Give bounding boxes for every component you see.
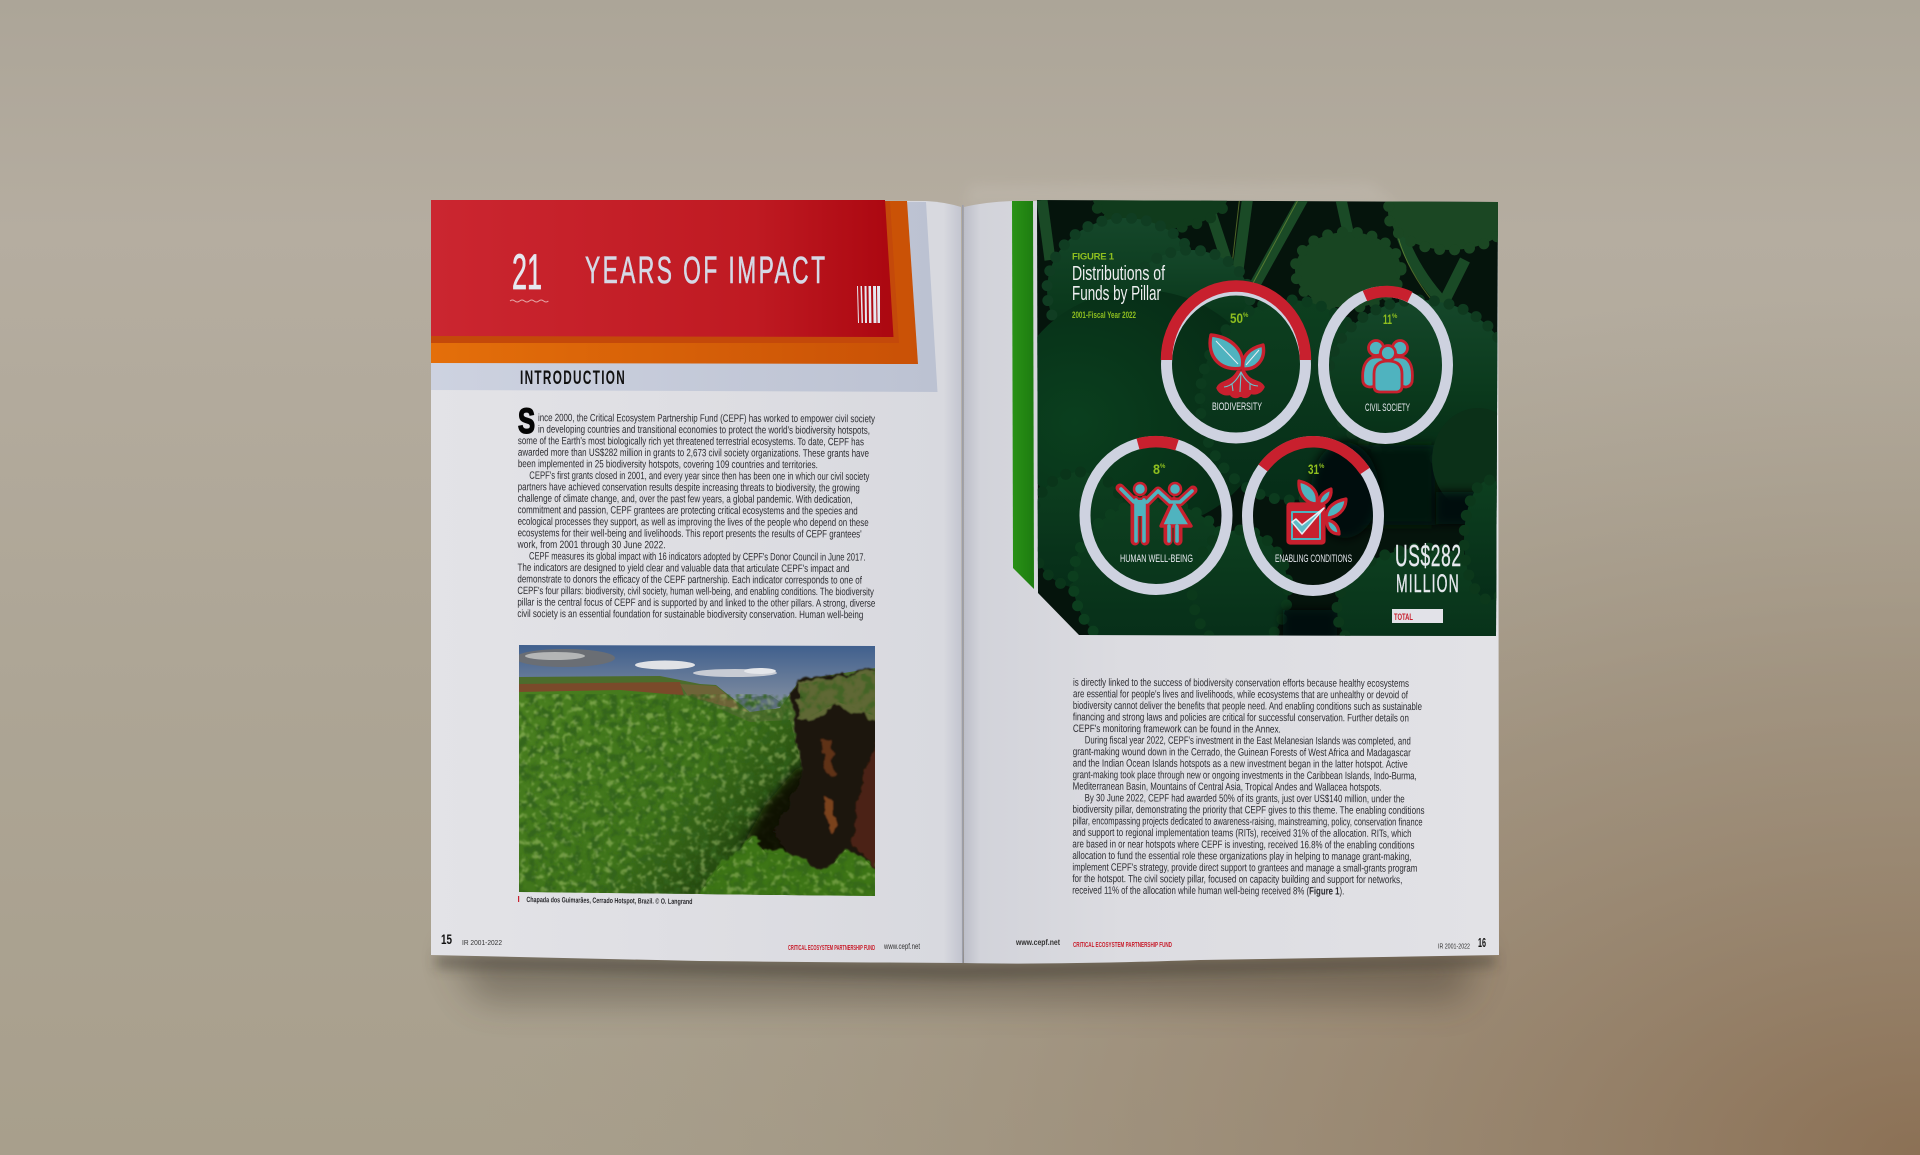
body text right page: are based in or near hotspots where CEPF is investing, received 16.8% of the enabling conditions xyxy=(1072,838,1414,852)
body text right page: received 11% of the allocation while human well-being received 8% (Figure 1). xyxy=(1072,885,1344,898)
figure heading: Distributions of xyxy=(1072,263,1165,285)
body text left page: CEPF's four pillars: biodiversity, civil society, human well-being, and enabling conditions. The biodiversity xyxy=(517,585,874,598)
footer right page: CRITICAL ECOSYSTEM PARTNERSHIP FUND xyxy=(1073,942,1172,949)
body text right page: grant-making wound down in the Cerrado, the Guinean Forests of West Africa and Madagascar xyxy=(1073,746,1411,759)
body text left page: ecosystems for their well-being and livelihoods. This report presents the results of CEPF grantees' xyxy=(518,527,862,541)
magazine shadow xyxy=(436,183,1495,1000)
footer left page: IR 2001-2022 xyxy=(462,938,502,947)
footer right page xyxy=(1015,935,1486,950)
body text right page: allocation to fund the essential role these organizations play in helping to manage grant-making, xyxy=(1072,850,1411,863)
ring: enabling conditions 31%: ENABLING CONDITIONS xyxy=(1275,553,1352,565)
drop cap: S xyxy=(518,402,535,441)
ring: civil society 11%: CIVIL SOCIETY xyxy=(1365,402,1410,414)
body text left page: awarded more than US$282 million in grants to 2,673 civil society organizations. These grants have xyxy=(518,447,869,460)
body text left page: civil society is an essential foundation for sustainable biodiversity conservation. Human well-being xyxy=(517,608,863,621)
body text left page: been implemented in 25 biodiversity hotspots, covering 109 countries and territories. xyxy=(518,458,818,471)
body text right page: is directly linked to the success of biodiversity conservation efforts because healthy ecosystems xyxy=(1073,677,1409,690)
footer left page: 15 xyxy=(441,932,452,947)
photo caption: Chapada dos Guimarães, Cerrado Hotspot, Brazil. © O. Langrand xyxy=(526,895,693,906)
body text left page: work, from 2001 through 30 June 2022. xyxy=(517,539,666,551)
body text right page: Mediterranean Basin, Mountains of Central Asia, Tropical Andes and Wallacea hotspots. xyxy=(1073,781,1382,794)
icon: leaves and roots xyxy=(1210,335,1264,397)
left page xyxy=(431,200,962,963)
chapter number 21: 21 xyxy=(512,244,542,300)
forest background xyxy=(1037,200,1498,636)
ring: human well-being 8%: HUMAN WELL-BEING xyxy=(1120,553,1193,565)
green bar xyxy=(1012,201,1034,589)
body text right page: By 30 June 2022, CEPF had awarded 50% of its grants, just over US$140 million, under the xyxy=(1085,792,1405,805)
total amount: TOTAL xyxy=(1394,612,1413,622)
body text left page: pillar is the central focus of CEPF and is supported by and linked to the other pillars. A strong, diverse xyxy=(517,596,875,610)
ring: human well-being 8%: 8 xyxy=(1153,461,1160,477)
body text left page: commitment and passion, CEPF grantees are protecting critical ecosystems and the species and xyxy=(518,504,858,517)
footer left page: www.cepf.net xyxy=(883,942,921,951)
ring: biodiversity 50%: 50 xyxy=(1230,310,1243,326)
spine xyxy=(962,205,964,963)
body text left page: ince 2000, the Critical Ecosystem Partnership Fund (CEPF) has worked to empower civil society xyxy=(538,412,876,425)
body text left page xyxy=(517,412,876,621)
body text left page: ecological processes they support, as well as improving the lives of the people who depend on these xyxy=(518,516,869,529)
ring: civil society 11% xyxy=(1324,291,1448,438)
heading: introduction: INTRODUCTION xyxy=(520,368,625,389)
body text left page: some of the Earth's most biologically rich yet threatened terrestrial ecosystems. To date, CEPF has xyxy=(518,435,864,448)
total amount: MILLION xyxy=(1396,571,1459,598)
body text right page: grant-making took place through new or ongoing investments in the Caribbean Islands, Indo-Burma, xyxy=(1073,769,1417,782)
ring: human well-being 8%: % xyxy=(1160,464,1166,470)
body text right page: implement CEPF's strategy, provide direct support to grantees and manage a small-grants program xyxy=(1072,861,1418,875)
body text right page: CEPF's monitoring framework can be found in the Annex. xyxy=(1073,723,1281,736)
photo: Chapada dos Guimaraes canyon forest xyxy=(515,645,880,900)
stripes decoration xyxy=(857,286,880,323)
total amount: US$282 xyxy=(1395,539,1461,573)
body text left page: The indicators are designed to yield clear and valuable data that articulate CEPF's impact and xyxy=(517,562,850,575)
body text right page: are essential for people's lives and livelihoods, while ecosystems that are unhealthy or devoid of xyxy=(1073,688,1408,701)
body text left page: demonstrate to donors the efficacy of the CEPF partnership. Each indicator corresponds to one of xyxy=(517,573,862,587)
ring: enabling conditions 31%: 31 xyxy=(1308,461,1319,477)
body text left page: in developing countries and transitional economies to protect the world's biodiversity hotspots, xyxy=(538,424,870,437)
banner layers xyxy=(431,200,938,392)
body text right page: and the Indian Ocean Islands hotspots as a new investment began in the latter hotspot. Active xyxy=(1073,757,1408,771)
icon: two people holding hands xyxy=(1120,483,1193,541)
body text right page: During fiscal year 2022, CEPF's investment in the East Melanesian Islands was completed, and xyxy=(1085,734,1411,748)
right page xyxy=(964,161,1524,964)
body text right page: and support to regional implementation teams (RITs), received 31% of the allocation. RITs, which xyxy=(1072,827,1412,840)
body text left page: partners have achieved conservation results despite increasing threats to biodiversity, the growing xyxy=(518,481,860,494)
footer left page: CRITICAL ECOSYSTEM PARTNERSHIP FUND xyxy=(788,945,875,952)
footer right page: www.cepf.net xyxy=(1015,938,1060,947)
ring: biodiversity 50% xyxy=(1166,286,1306,438)
ring: biodiversity 50%: BIODIVERSITY xyxy=(1212,401,1262,413)
ring: enabling conditions 31% xyxy=(1248,442,1378,590)
icon: group of people xyxy=(1363,340,1412,392)
infographic panel: funds by pillar xyxy=(1037,200,1498,636)
ring: civil society 11%: 11 xyxy=(1383,311,1392,327)
footer left page xyxy=(441,932,921,952)
ring: biodiversity 50%: % xyxy=(1243,313,1249,319)
icon: checkbox with leaves xyxy=(1288,481,1346,543)
figure heading: Funds by Pillar xyxy=(1072,283,1161,305)
total amount xyxy=(1392,539,1461,623)
wavy underline xyxy=(510,300,548,302)
body text right page: financing and strong laws and policies are critical for successful conservation. Further details on xyxy=(1073,711,1409,724)
title: YEARS OF IMPACT xyxy=(585,249,825,291)
body text left page: challenge of climate change, and, over the past few years, a global pandemic. With dedication, xyxy=(518,493,853,506)
figure heading: FIGURE 1 xyxy=(1072,252,1115,262)
body text right page: biodiversity pillar, demonstrating the priority that CEPF gives to this theme. The enabling conditions xyxy=(1073,804,1425,817)
footer right page: 16 xyxy=(1478,935,1486,950)
body text left page: CEPF measures its global impact with 16 indicators adopted by CEPF's Donor Council in June 2017. xyxy=(529,550,866,564)
body text right page xyxy=(1072,677,1425,898)
footer right page: IR 2001-2022 xyxy=(1438,942,1470,950)
figure heading: 2001-Fiscal Year 2022 xyxy=(1072,310,1136,320)
ring: civil society 11%: % xyxy=(1392,314,1398,320)
figure heading xyxy=(1072,252,1165,320)
body text right page: biodiversity cannot deliver the benefits that people need. And enabling conditions such as sustainable xyxy=(1073,700,1422,713)
ring: enabling conditions 31%: % xyxy=(1319,464,1325,470)
body text right page: pillar, encompassing projects dedicated to awareness-raising, mainstreaming, policy, conservation finance xyxy=(1073,815,1423,829)
body text left page: CEPF's first grants closed in 2001, and every year since then has been one in which our civil society xyxy=(529,470,870,483)
body text right page: for the hotspot. The civil society pillar, focused on capacity building and support for networks, xyxy=(1072,873,1402,886)
ring: human well-being 8% xyxy=(1085,442,1227,590)
